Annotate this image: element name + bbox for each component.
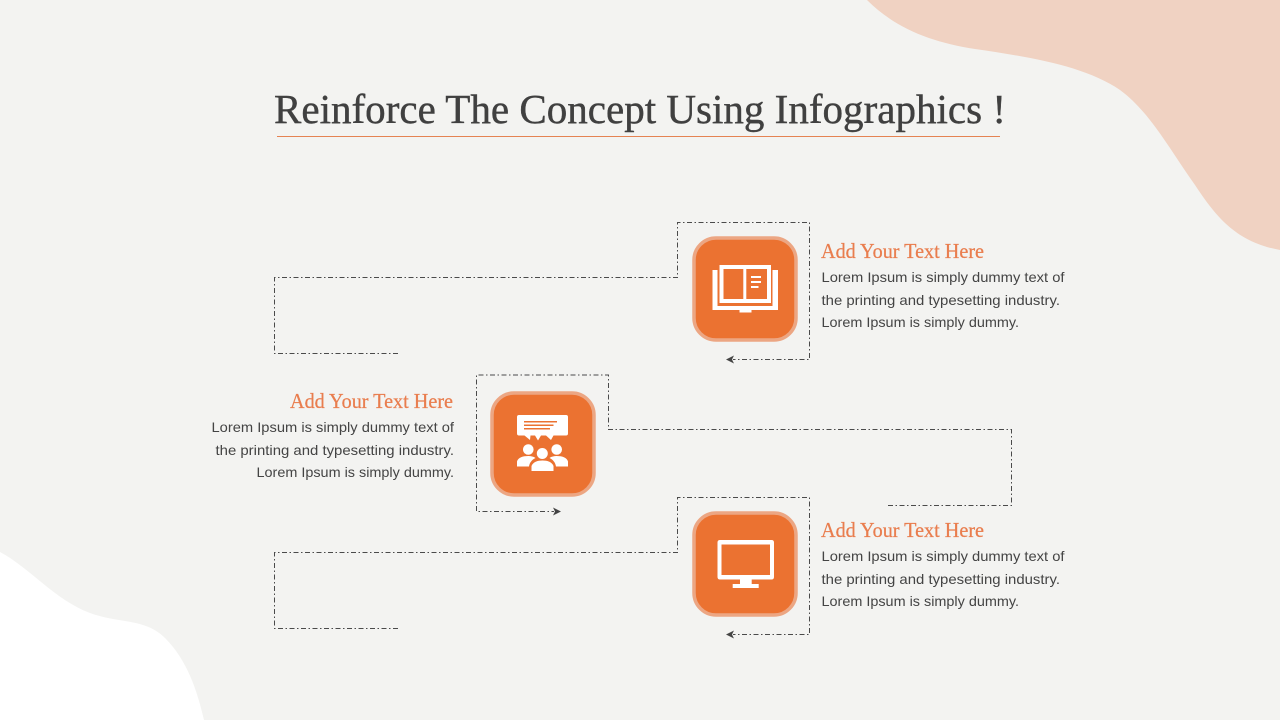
heading: Add Your Text Here <box>821 239 984 263</box>
body text: Lorem Ipsum is simply dummy text of <box>822 548 1065 564</box>
body text: Lorem Ipsum is simply dummy text of <box>822 269 1065 285</box>
title underline <box>277 136 1000 137</box>
background blob: top right <box>867 0 1280 250</box>
heading: Add Your Text Here <box>290 389 453 413</box>
tile: book <box>694 238 796 340</box>
connector: top step <box>274 222 810 364</box>
icon: monitor <box>718 540 774 588</box>
connector: middle step <box>476 375 1012 516</box>
text block: top right <box>821 239 1065 330</box>
background blob: bottom left <box>0 552 204 720</box>
icon: open book <box>712 265 778 312</box>
body text <box>822 269 1065 330</box>
body text: Lorem Ipsum is simply dummy. <box>822 314 1019 330</box>
body text: the printing and typesetting industry. <box>822 292 1060 308</box>
heading: Add Your Text Here <box>821 518 984 542</box>
body text: Lorem Ipsum is simply dummy. <box>822 593 1019 609</box>
tile: people <box>492 393 594 495</box>
body text: the printing and typesetting industry. <box>822 571 1060 587</box>
text block: bottom right <box>821 518 1065 609</box>
text block: middle left <box>212 389 454 480</box>
tile: monitor <box>694 513 796 615</box>
body text: Lorem Ipsum is simply dummy text of <box>212 419 454 435</box>
title: Reinforce The Concept Using Infographics ! <box>274 86 1006 132</box>
body text: the printing and typesetting industry. <box>216 442 454 458</box>
body text <box>822 548 1065 609</box>
body text <box>212 419 454 480</box>
icon: group with speech bubble <box>517 415 568 471</box>
connector: bottom step <box>274 498 810 638</box>
body text: Lorem Ipsum is simply dummy. <box>256 464 454 480</box>
